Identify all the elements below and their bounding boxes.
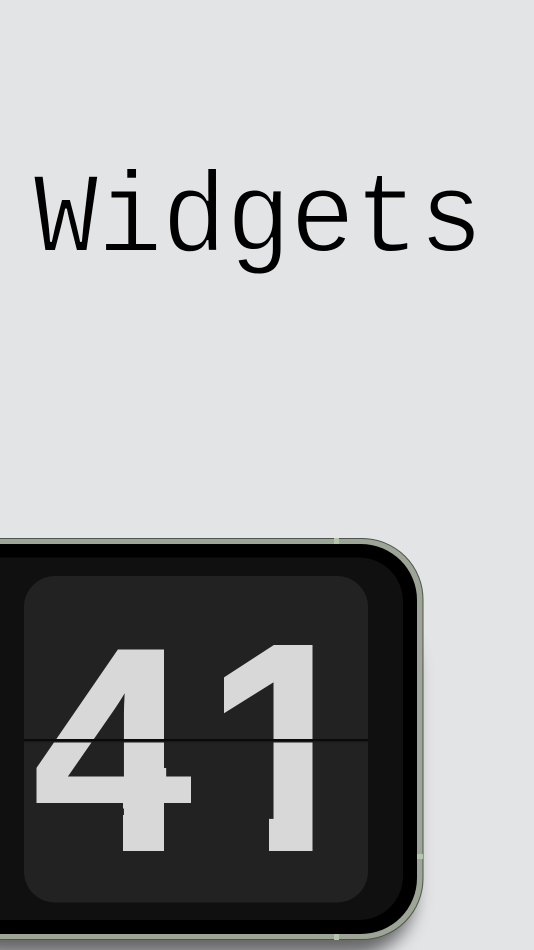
device shadow: [0, 610, 414, 950]
device widget: [0, 538, 423, 950]
device metal frame: [0, 538, 423, 940]
flip card panel: [24, 576, 368, 902]
frame antenna bands: [334, 538, 423, 940]
widget body: [0, 558, 403, 920]
digit 1: 1: [205, 579, 372, 915]
digit 4: [36, 650, 191, 851]
black bezel: [0, 544, 417, 934]
title: Widgets: [34, 156, 484, 286]
flip hinge line: [24, 739, 368, 742]
flip clock digits: [36, 645, 312, 851]
digit 4: 4: [27, 590, 196, 908]
